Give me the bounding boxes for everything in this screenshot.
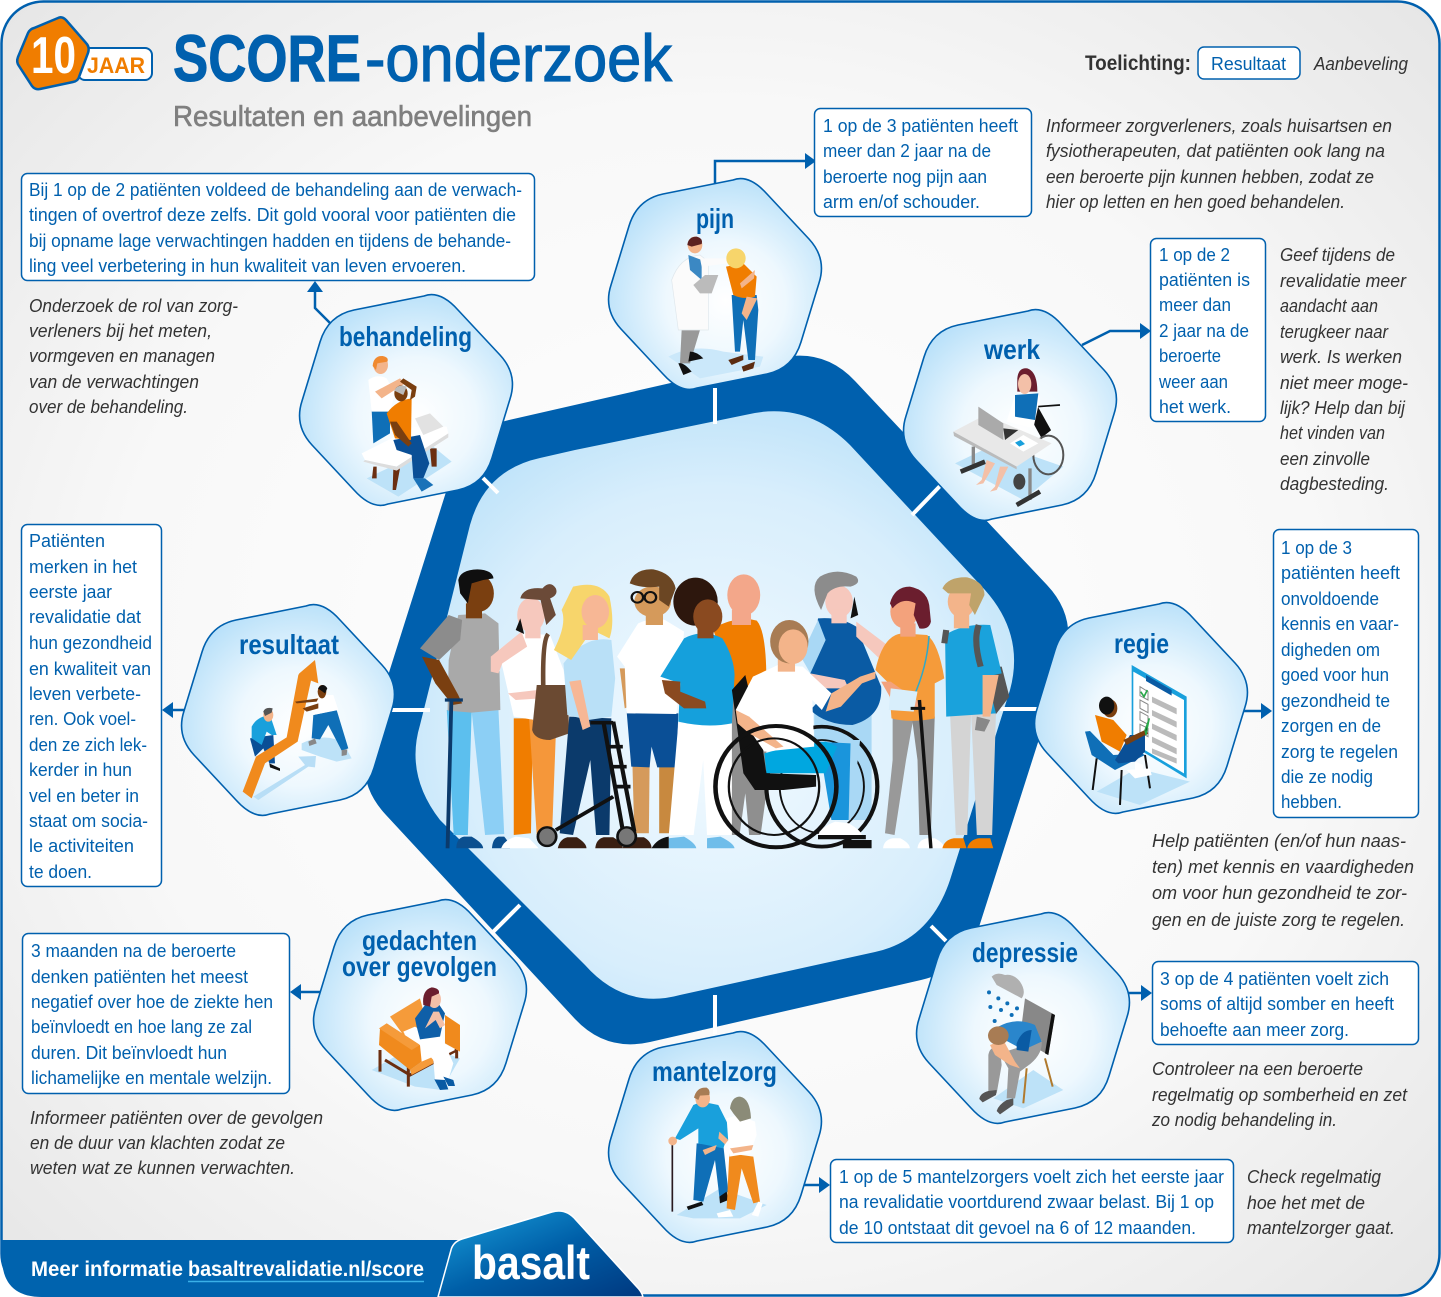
- recommendation: mantelzorg: Check regelmatig: [1247, 1166, 1382, 1187]
- result box: resultaat: eerste jaar: [29, 581, 112, 602]
- result box: resultaat: merken in het: [29, 556, 137, 577]
- central group of diverse patients: [420, 569, 1009, 848]
- recommendation: behandeling: van de verwachtingen: [29, 371, 199, 392]
- result box: resultaat: ren. Ook voel-: [29, 708, 136, 729]
- recommendation: regie: gen en de juiste zorg te regelen.: [1152, 909, 1405, 930]
- arrow: regie to result: [1230, 703, 1272, 719]
- recommendation: depressie: Controleer na een beroerte: [1152, 1058, 1363, 1079]
- result box: regie: 1 op de 3: [1281, 537, 1352, 558]
- result box: resultaat: [22, 524, 162, 886]
- result box: resultaat: en kwaliteit van: [29, 658, 151, 679]
- recommendation: behandeling: vormgeven en managen: [29, 345, 215, 366]
- recommendation: regie: [1152, 830, 1414, 930]
- basalt logo: [438, 1211, 643, 1297]
- result box: behandeling: [22, 174, 534, 280]
- result box: mantelzorg: 1 op de 5 mantelzorgers voelt zich het eerste jaar: [839, 1166, 1224, 1187]
- result box: regie: die ze nodig: [1281, 766, 1373, 787]
- result box: pijn: 1 op de 3 patiënten heeft: [823, 115, 1018, 136]
- result box: behandeling: bij opname lage verwachtingen hadden en tijdens de behande-: [29, 230, 511, 251]
- recommendation: werk: een zinvolle: [1280, 448, 1370, 469]
- result box: resultaat: hun gezondheid: [29, 632, 152, 653]
- result box: regie: zorg te regelen: [1281, 741, 1398, 762]
- result box: regie: hebben.: [1281, 791, 1342, 812]
- recommendation: depressie: zo nodig behandeling in.: [1151, 1109, 1337, 1130]
- result box: resultaat: le activiteiten: [29, 835, 134, 856]
- recommendation: behandeling: [29, 295, 238, 417]
- result box: depressie: soms of altijd somber en heeft: [1160, 993, 1394, 1014]
- result box: resultaat: staat om socia-: [29, 810, 148, 831]
- title: SCORE: [173, 21, 361, 95]
- result box: werk: meer dan: [1159, 294, 1231, 315]
- result box: gedachten over gevolgen: negatief over hoe de ziekte hen: [31, 991, 273, 1012]
- logo badge: 10 jaar: 10: [31, 27, 76, 85]
- result box: werk: 1 op de 2: [1159, 244, 1230, 265]
- person: bald man in orange, background: [713, 574, 766, 835]
- arrow: resultaat to result: [162, 702, 198, 718]
- central light hexagon: [416, 411, 1014, 999]
- person: man with dark curly hair and blue shirt: [652, 578, 735, 848]
- recommendation: regie: Help patiënten (en/of hun naas-: [1152, 830, 1406, 851]
- footer bar with more information: Meer informatie: [31, 1258, 183, 1281]
- recommendation: gedachten over gevolgen: [30, 1107, 323, 1178]
- recommendation: pijn: hier op letten en hen goed behandelen.: [1046, 191, 1345, 212]
- result box: werk: weer aan: [1158, 371, 1228, 392]
- hexagon: depressie: [917, 913, 1129, 1123]
- result box: mantelzorg: na revalidatie voortdurend zwaar belast. Bij 1 op: [839, 1191, 1214, 1212]
- recommendation: pijn: [1046, 115, 1392, 212]
- result box: gedachten over gevolgen: duren. Dit beïnvloedt hun: [31, 1042, 227, 1063]
- hexagon: regie: [1035, 603, 1247, 813]
- recommendation: behandeling: verleners bij het meten,: [29, 320, 212, 341]
- result box: resultaat: te doen.: [29, 861, 92, 882]
- result box: resultaat: kerder in hun: [29, 759, 132, 780]
- logo badge: 10 jaar: JAAR: [87, 53, 145, 78]
- arrow: gedachten to result: [290, 984, 335, 1000]
- illustration: woman in wheelchair at desk: [953, 368, 1063, 505]
- recommendation: behandeling: Onderzoek de rol van zorg-: [29, 295, 238, 316]
- hexagon: depressie: depressie: [972, 937, 1078, 968]
- hexagon: gedachten over gevolgen: over gevolgen: [342, 951, 497, 982]
- basalt logo: basalt: [472, 1236, 590, 1289]
- arrow: werk to result: [1082, 323, 1151, 345]
- legend: toelichting: Aanbeveling: [1313, 53, 1409, 74]
- hexagon: pijn: pijn: [696, 203, 734, 234]
- person: man with blond hair and backpack: [942, 577, 1009, 848]
- result box: werk: 2 jaar na de: [1159, 320, 1249, 341]
- person: man with cane in grey shirt: [420, 569, 510, 848]
- hexagon: behandeling: behandeling: [339, 321, 472, 352]
- title: -onderzoek: [365, 21, 673, 95]
- logo badge: 10 jaar: [17, 17, 152, 89]
- result box: resultaat: leven verbete-: [29, 683, 141, 704]
- illustration: person ticking a large checklist: [1085, 665, 1190, 805]
- result box: werk: beroerte: [1159, 345, 1221, 366]
- recommendation: depressie: regelmatig op somberheid en zet: [1152, 1084, 1408, 1105]
- legend: toelichting: Toelichting:: [1085, 52, 1191, 75]
- result box: regie: [1274, 530, 1418, 818]
- hexagon: mantelzorg: [609, 1032, 821, 1242]
- hexagon: werk: werk: [983, 334, 1040, 365]
- result box: regie: goed voor hun: [1281, 664, 1389, 685]
- hexagon: mantelzorg: mantelzorg: [652, 1056, 777, 1087]
- footer bar with more information: [2, 1240, 470, 1297]
- person: man with glasses: [617, 569, 684, 848]
- legend: toelichting: [1085, 47, 1409, 79]
- illustration: doctor with patient: [668, 237, 763, 378]
- recommendation: werk: lijk? Help dan bij: [1280, 397, 1406, 418]
- hexagon: regie: regie: [1114, 628, 1169, 659]
- result box: regie: kennis en vaar-: [1281, 613, 1399, 634]
- result box: gedachten over gevolgen: [22, 934, 290, 1094]
- recommendation: werk: niet meer moge-: [1280, 372, 1408, 393]
- result box: pijn: meer dan 2 jaar na de: [823, 140, 991, 161]
- result box: regie: zorgen en de: [1281, 715, 1381, 736]
- connector ticks between ring and hexagons: [392, 388, 1040, 1034]
- recommendation: werk: revalidatie meer: [1280, 270, 1407, 291]
- result box: depressie: [1152, 962, 1418, 1044]
- illustration: carer supporting man with cane: [668, 1088, 767, 1218]
- illustration: two people lifting rising arrow: [243, 660, 352, 800]
- arrow: depressie to result: [1115, 985, 1152, 1001]
- recommendation: mantelzorg: [1247, 1166, 1395, 1238]
- hexagon: gedachten over gevolgen: gedachten: [362, 925, 477, 956]
- hexagon: gedachten over gevolgen: [314, 900, 526, 1110]
- result box: behandeling: ling veel verbetering in hun kwaliteit van leven ervoeren.: [29, 255, 466, 276]
- person: woman with burgundy hair and cane: [875, 587, 944, 848]
- title: [173, 21, 673, 95]
- illustration: therapist treating patient on bench: [362, 356, 452, 497]
- subtitle: Resultaten en aanbevelingen: [173, 101, 532, 133]
- recommendation: mantelzorg: hoe het met de: [1247, 1192, 1365, 1213]
- result box: regie: onvoldoende: [1281, 588, 1379, 609]
- recommendation: gedachten over gevolgen: weten wat ze kunnen verwachten.: [30, 1157, 295, 1178]
- hexagon: resultaat: resultaat: [239, 629, 339, 660]
- footer bar with more information: basaltrevalidatie.nl/score: [188, 1258, 424, 1281]
- person: woman in wheelchair: [715, 620, 877, 848]
- result box: regie: patiënten heeft: [1281, 562, 1400, 583]
- arrow: behandeling to result: [307, 281, 330, 323]
- result box: resultaat: den ze zich lek-: [29, 734, 147, 755]
- result box: gedachten over gevolgen: beïnvloedt en hoe lang ze zal: [31, 1016, 252, 1037]
- hexagon: pijn: [609, 179, 821, 389]
- legend: toelichting: Resultaat: [1211, 53, 1286, 74]
- result box: mantelzorg: de 10 ontstaat dit gevoel na 6 of 12 maanden.: [839, 1217, 1196, 1238]
- recommendation: werk: [1280, 244, 1408, 494]
- hexagon: resultaat: [182, 605, 394, 815]
- illustration: depressed person under rain cloud: [979, 974, 1063, 1114]
- result box: depressie: behoefte aan meer zorg.: [1160, 1019, 1349, 1040]
- recommendation: werk: aandacht aan: [1280, 295, 1378, 316]
- recommendation: mantelzorg: mantelzorger gaat.: [1247, 1217, 1395, 1238]
- person: grey haired woman on phone: [801, 572, 889, 820]
- result box: resultaat: Patiënten: [29, 530, 105, 551]
- result box: regie: gezondheid te: [1281, 690, 1390, 711]
- result box: werk: het werk.: [1159, 396, 1231, 417]
- result box: regie: digheden om: [1281, 639, 1380, 660]
- person: blonde woman with walker: [538, 585, 636, 848]
- arrow: mantelzorg to result: [795, 1177, 830, 1193]
- result box: pijn: arm en/of schouder.: [823, 191, 980, 212]
- recommendation: werk: het vinden van: [1280, 422, 1385, 443]
- recommendation: gedachten over gevolgen: Informeer patiënten over de gevolgen: [30, 1107, 323, 1128]
- result box: behandeling: tingen of overtrof deze zelfs. Dit gold vooral voor patiënten die: [29, 204, 516, 225]
- recommendation: regie: om voor hun gezondheid te zor-: [1152, 882, 1407, 903]
- recommendation: pijn: een beroerte pijn kunnen hebben, zodat ze: [1046, 166, 1374, 187]
- recommendation: behandeling: over de behandeling.: [29, 396, 188, 417]
- result box: pijn: [814, 108, 1032, 216]
- result box: depressie: 3 op de 4 patiënten voelt zich: [1160, 968, 1389, 989]
- arrow: pijn to result: [715, 153, 816, 183]
- recommendation: werk: Geef tijdens de: [1280, 244, 1395, 265]
- recommendation: werk: werk. Is werken: [1280, 346, 1402, 367]
- result box: behandeling: Bij 1 op de 2 patiënten voldeed de behandeling aan de verwach-: [29, 179, 522, 200]
- recommendation: pijn: fysiotherapeuten, dat patiënten ook lang na: [1046, 140, 1385, 161]
- result box: werk: [1150, 238, 1266, 422]
- result box: resultaat: revalidatie dat: [29, 606, 141, 627]
- person: woman with brown bun and bag: [491, 584, 569, 848]
- illustration: person in orange armchair: [372, 987, 460, 1090]
- recommendation: gedachten over gevolgen: en de duur van klachten zodat ze: [30, 1132, 285, 1153]
- hexagon: werk: [904, 310, 1116, 520]
- result box: gedachten over gevolgen: 3 maanden na de beroerte: [31, 940, 236, 961]
- recommendation: werk: terugkeer naar: [1280, 321, 1389, 342]
- result box: pijn: beroerte nog pijn aan: [823, 166, 987, 187]
- result box: gedachten over gevolgen: denken patiënten het meest: [31, 966, 248, 987]
- recommendation: pijn: Informeer zorgverleners, zoals huisartsen en: [1046, 115, 1392, 136]
- recommendation: werk: dagbesteding.: [1280, 473, 1389, 494]
- result box: mantelzorg: [830, 1160, 1234, 1242]
- result box: werk: patiënten is: [1159, 269, 1250, 290]
- hexagon: behandeling: [300, 295, 512, 505]
- recommendation: depressie: [1151, 1058, 1408, 1130]
- result box: gedachten over gevolgen: lichamelijke en mentale welzijn.: [31, 1067, 272, 1088]
- result box: resultaat: vel en beter in: [29, 785, 139, 806]
- recommendation: regie: ten) met kennis en vaardigheden: [1152, 856, 1414, 877]
- central hexagon ring: [364, 356, 1068, 1044]
